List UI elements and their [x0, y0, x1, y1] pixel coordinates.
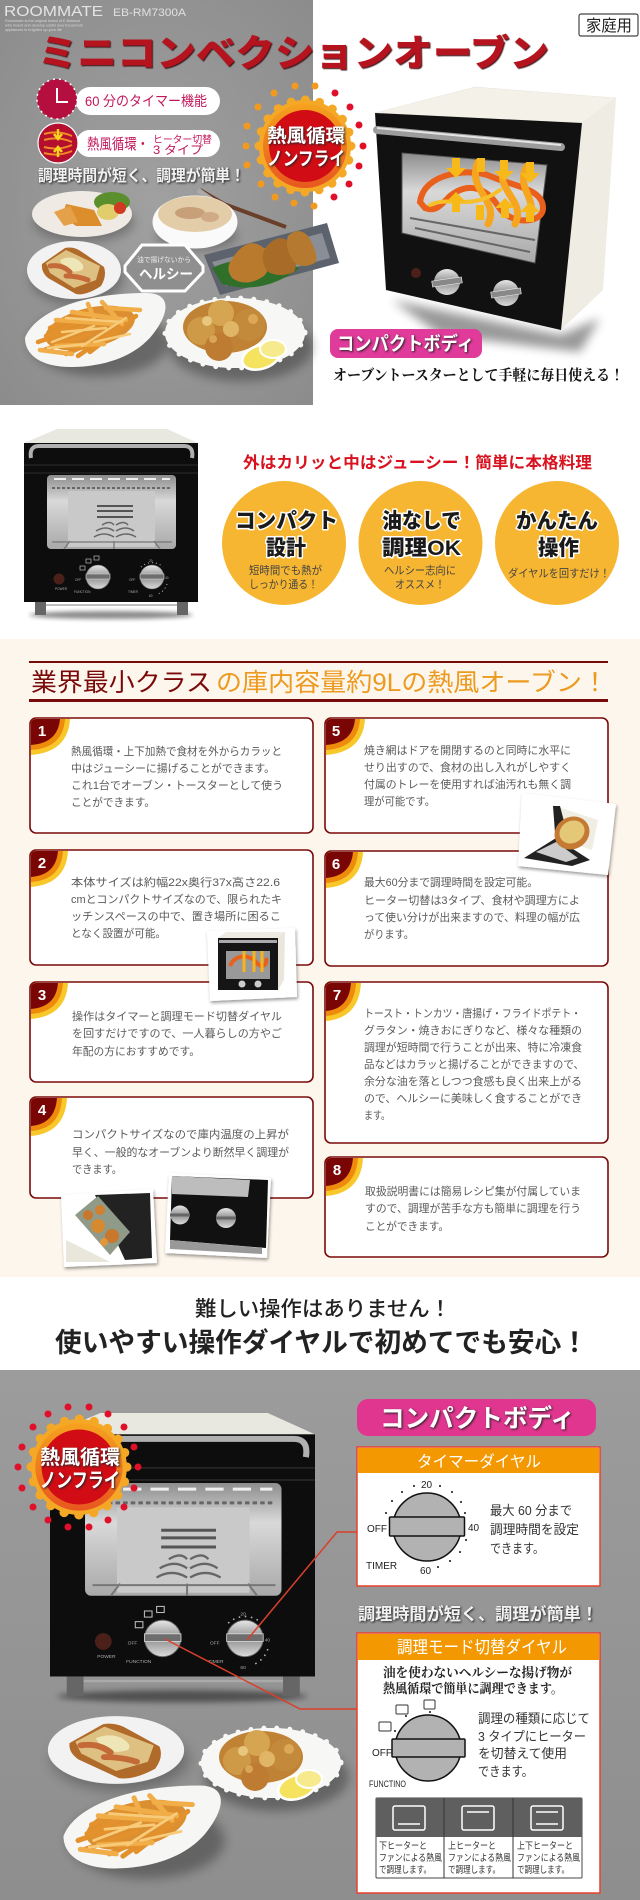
mode dial drawing: [369, 1700, 465, 1789]
card 6: 最大60分まで調理時間を設定可能。: [364, 875, 538, 889]
oven shadow: [392, 300, 600, 352]
oven controls: [411, 268, 521, 306]
dish: toast: [27, 241, 124, 305]
card 4: コンパクトサイズなので庫内温度の上昇が: [72, 1127, 289, 1141]
card 7: グラタン・焼きおにぎりなど、様々な種類の: [364, 1023, 582, 1037]
heater type three: で調理します。: [517, 1865, 569, 1876]
card 4: 4: [38, 1102, 47, 1119]
card 5: 理が可能です。: [364, 794, 435, 808]
mode description: できます。: [478, 1764, 533, 1779]
timer dial drawing: 20: [421, 1480, 433, 1491]
cream background: [0, 639, 640, 1277]
timer dial drawing: OFF: [367, 1524, 387, 1535]
card 5: 焼き網はドアを開閉するのと同時に水平に: [364, 743, 571, 757]
benefit: compact: [222, 481, 346, 605]
healthy speech bubble: ヘルシー: [139, 266, 193, 282]
card 1: 熱風循環・上下加熱で食材を外からカラッと: [71, 744, 282, 758]
oven handle: [377, 128, 561, 147]
panel: cooking mode dial: 調理モード切替ダイヤル: [397, 1638, 567, 1657]
photo: oven front with flames: [207, 928, 297, 1001]
card 2: 2: [38, 855, 46, 872]
photo: tray with chicken: [61, 1189, 157, 1267]
caption: オーブントースターとして手軽に毎日使える！: [333, 366, 624, 384]
card 8: ことができます。: [365, 1219, 449, 1233]
dish: toast and salad: [32, 191, 134, 242]
mode intro text: 油を使わないヘルシーな揚げ物が: [383, 1665, 572, 1680]
card 6: って使い分けが出来ますので、料理の幅が広: [364, 910, 580, 924]
card 3: 3: [38, 987, 46, 1004]
brand description: appliances to brighten up your life: [5, 28, 62, 32]
mode description: 調理の種類に応じて: [478, 1711, 590, 1726]
connector: timer dial: [247, 1532, 357, 1640]
heat arrows: [446, 158, 540, 222]
feature: hot air: 熱風循環・: [87, 136, 149, 153]
card 6: ヒーター切替は3タイプ、食材や調理方によ: [364, 893, 580, 907]
card 3: を回すだけですので、一人暮らしの方やご: [72, 1026, 282, 1040]
mode dial drawing: FUNCTINO: [369, 1779, 406, 1789]
card 7: ます。: [364, 1109, 390, 1122]
compact body label: コンパクトボディ: [337, 332, 474, 355]
card 4: [30, 1097, 313, 1198]
heater type two: 上ヒーターと: [448, 1841, 496, 1852]
card 7: ので、ヘルシーに美味しく食することができ: [364, 1091, 582, 1105]
panel: timer dial: [357, 1447, 600, 1586]
card 1: 1: [38, 723, 46, 740]
benefits heading: 外はカリッと中はジューシー！簡単に本格料理: [243, 453, 592, 472]
section: three benefits: [24, 429, 619, 619]
feature: timer: 60 分のタイマー機能: [85, 93, 207, 109]
benefit: oil free: [358, 481, 482, 605]
card 7: トースト・トンカツ・唐揚げ・フライドポテト・: [364, 1006, 581, 1020]
timer dial drawing: [366, 1480, 480, 1577]
card 1: これ1台でオーブン・トースターとして使う: [71, 778, 283, 792]
timer description: 調理時間を設定: [490, 1522, 579, 1537]
compact body label: [330, 329, 482, 358]
healthy speech bubble: 油で揚げないから: [137, 255, 191, 264]
card 1: 中はジューシーに揚げることができます。: [71, 761, 275, 775]
heater type one: [379, 1841, 442, 1876]
heater type two: [448, 1841, 511, 1876]
dish: fried chicken: [165, 298, 313, 381]
feature: hot air: [38, 123, 220, 163]
badge text: 熱風循環: [40, 1446, 120, 1469]
timer description: できます。: [490, 1541, 544, 1556]
timer description: [490, 1503, 579, 1556]
benefit: oil free: 油なしで: [382, 510, 461, 533]
dish: gratin and fork: [154, 190, 286, 250]
benefit: compact: コンパクト: [235, 510, 338, 533]
badge text: ノンフライ: [40, 1470, 120, 1492]
icon: top and bottom heater: [531, 1806, 563, 1830]
benefit: easy: [495, 481, 619, 605]
card 3: 年配の方におすすめです。: [72, 1044, 200, 1058]
card 8: [325, 1157, 608, 1257]
dish: fries: [25, 293, 169, 376]
healthy speech bubble: [125, 245, 203, 291]
household use tag: [579, 14, 638, 36]
heater type one: で調理します。: [379, 1865, 431, 1876]
gray background: [0, 1370, 640, 1900]
mode intro text: [383, 1665, 572, 1696]
timer dial drawing: TIMER: [366, 1561, 397, 1572]
card 8: 8: [333, 1162, 341, 1179]
card 2: 本体サイズは約幅22x奥行37x高さ22.6: [71, 875, 280, 889]
feature: hot air: ヒーター切替: [153, 133, 212, 146]
photo: control dials: [165, 1173, 271, 1258]
card 2: ッチンスペースの中で、置き場所に困るこ: [71, 909, 281, 923]
mode dial drawing: OFF: [372, 1748, 392, 1759]
dial headline: [55, 1298, 588, 1358]
card 5: せり出すので、食材の出し入れがしやすく: [364, 760, 571, 774]
card 6: [325, 851, 608, 966]
features heading: の庫内容量約9Lの熱風オーブン！: [216, 669, 608, 697]
card 7: 品などはカラッと揚げることができますので、: [364, 1057, 584, 1071]
card 1: ことができます。: [71, 795, 155, 809]
benefit: easy: ダイヤルを回すだけ！: [508, 566, 610, 580]
connector: mode dial: [165, 1639, 357, 1709]
hero oven: [375, 87, 616, 352]
badge text: ノンフライ: [267, 149, 345, 170]
benefit: oil free: オススメ！: [395, 578, 445, 591]
front oven photo: [24, 429, 198, 619]
card 7: 7: [333, 987, 341, 1004]
card 8: 取扱説明書には簡易レシピ集が付属していま: [365, 1184, 581, 1198]
mode intro text: 熱風循環で簡単に調理できます。: [383, 1681, 563, 1696]
section: control dials: [0, 1370, 640, 1900]
household use tag: 家庭用: [586, 17, 632, 35]
benefit: compact: しっかり通る！: [249, 578, 318, 591]
benefit: oil free: ヘルシー志向に: [384, 563, 456, 577]
panel: cooking mode dial: [357, 1633, 600, 1893]
dial headline: 使いやすい操作ダイヤルで初めてでも安心！: [55, 1327, 588, 1358]
benefit: compact: 設計: [266, 537, 306, 560]
heater type two: ファンによる熱風: [448, 1852, 511, 1864]
mode description: [478, 1711, 590, 1779]
icon: top heater: [462, 1806, 494, 1830]
heater type one: ファンによる熱風: [379, 1852, 442, 1864]
card 7: [325, 982, 608, 1143]
compact body heading: [357, 1399, 596, 1436]
card 2: となく設置が可能。: [71, 926, 166, 940]
card 5: 5: [332, 723, 340, 740]
photo: toast on rack: [518, 793, 616, 875]
dish: rice balls: [204, 223, 339, 295]
mode description: 3 タイプにヒーター: [478, 1729, 586, 1744]
badge sun: [259, 100, 351, 192]
card 5: 付属のトレーを使用すれば油汚れも無く調: [364, 777, 571, 791]
badge text: [40, 1446, 120, 1492]
model number: EB-RM7300A: [113, 7, 187, 19]
card 3: [30, 982, 313, 1082]
timer description: 最大 60 分まで: [490, 1503, 572, 1518]
brand description: who invent and develop useful new household: [5, 24, 83, 28]
dial headline: 難しい操作はありません！: [195, 1298, 451, 1321]
subheading: 調理時間が短く、調理が簡単！: [358, 1604, 598, 1624]
convection badge: [242, 82, 366, 210]
tagline: 調理時間が短く、調理が簡単！: [38, 166, 245, 185]
heater type one: 下ヒーターと: [379, 1841, 427, 1852]
card 1: [30, 718, 313, 833]
badge text: [267, 125, 345, 170]
gray background half: [0, 0, 313, 405]
brand description: Roommate is the original brand of E.Balance: [5, 19, 80, 23]
dish: toast: [48, 1716, 188, 1791]
feature: hot air: 3 タイプ: [153, 143, 203, 157]
oven window: [402, 153, 547, 263]
heater type table: [376, 1798, 582, 1878]
card 3: 操作はタイマーと調理モード切替ダイヤル: [72, 1009, 282, 1023]
benefit: easy: かんたん: [516, 510, 598, 533]
card 4: 早く、一般的なオーブンより断然早く調理が: [72, 1145, 289, 1159]
timer dial drawing: 60: [420, 1566, 432, 1577]
badge dots: [242, 82, 366, 210]
card 4: できます。: [72, 1163, 122, 1176]
card 5: [325, 718, 608, 833]
heater type two: で調理します。: [448, 1865, 500, 1876]
card 6: がります。: [364, 927, 414, 941]
title: ミニコンベクションオーブン: [38, 32, 549, 74]
section: eight features: [0, 639, 640, 1277]
heater type three: ファンによる熱風: [517, 1852, 580, 1864]
card 6: 6: [332, 856, 340, 873]
card 7: 調理が短時間で行うことが出来、特に冷凍食: [364, 1040, 582, 1054]
heater type three: 上下ヒーターと: [517, 1841, 573, 1852]
dish: fries: [63, 1786, 225, 1879]
timer dial drawing: 40: [468, 1523, 480, 1534]
panel: timer dial: タイマーダイヤル: [417, 1453, 541, 1471]
mode description: を切替えて使用: [478, 1746, 567, 1761]
card 8: すので、調理が苦手な方も簡単に調理を行う: [365, 1201, 581, 1215]
heater type three: [517, 1841, 580, 1876]
card 2: cmとコンパクトサイズなので、限られたキ: [71, 892, 282, 906]
oven front view: [50, 1413, 315, 1702]
brand description: [5, 19, 83, 32]
heat flames: [420, 162, 543, 224]
card 7: 余分な油を落としつつ食感も良く出来上がる: [364, 1074, 582, 1088]
benefit: easy: 操作: [538, 537, 579, 560]
feature: timer: [37, 79, 220, 119]
badge dots: [14, 1404, 142, 1530]
benefit: compact: 短時間でも熱が: [249, 563, 322, 577]
brand logo: ROOMMATE: [4, 3, 103, 20]
icon: bottom heater: [393, 1806, 425, 1830]
benefit: oil free: 調理OK: [382, 537, 461, 560]
badge text: 熱風循環: [267, 125, 345, 147]
compact body heading: コンパクトボディ: [380, 1404, 575, 1433]
badge sun: [31, 1419, 127, 1515]
hero panel: [0, 0, 638, 405]
card 2: [30, 850, 313, 965]
features heading: 業界最小クラス: [31, 669, 212, 697]
dish: fried chicken: [201, 1728, 349, 1811]
